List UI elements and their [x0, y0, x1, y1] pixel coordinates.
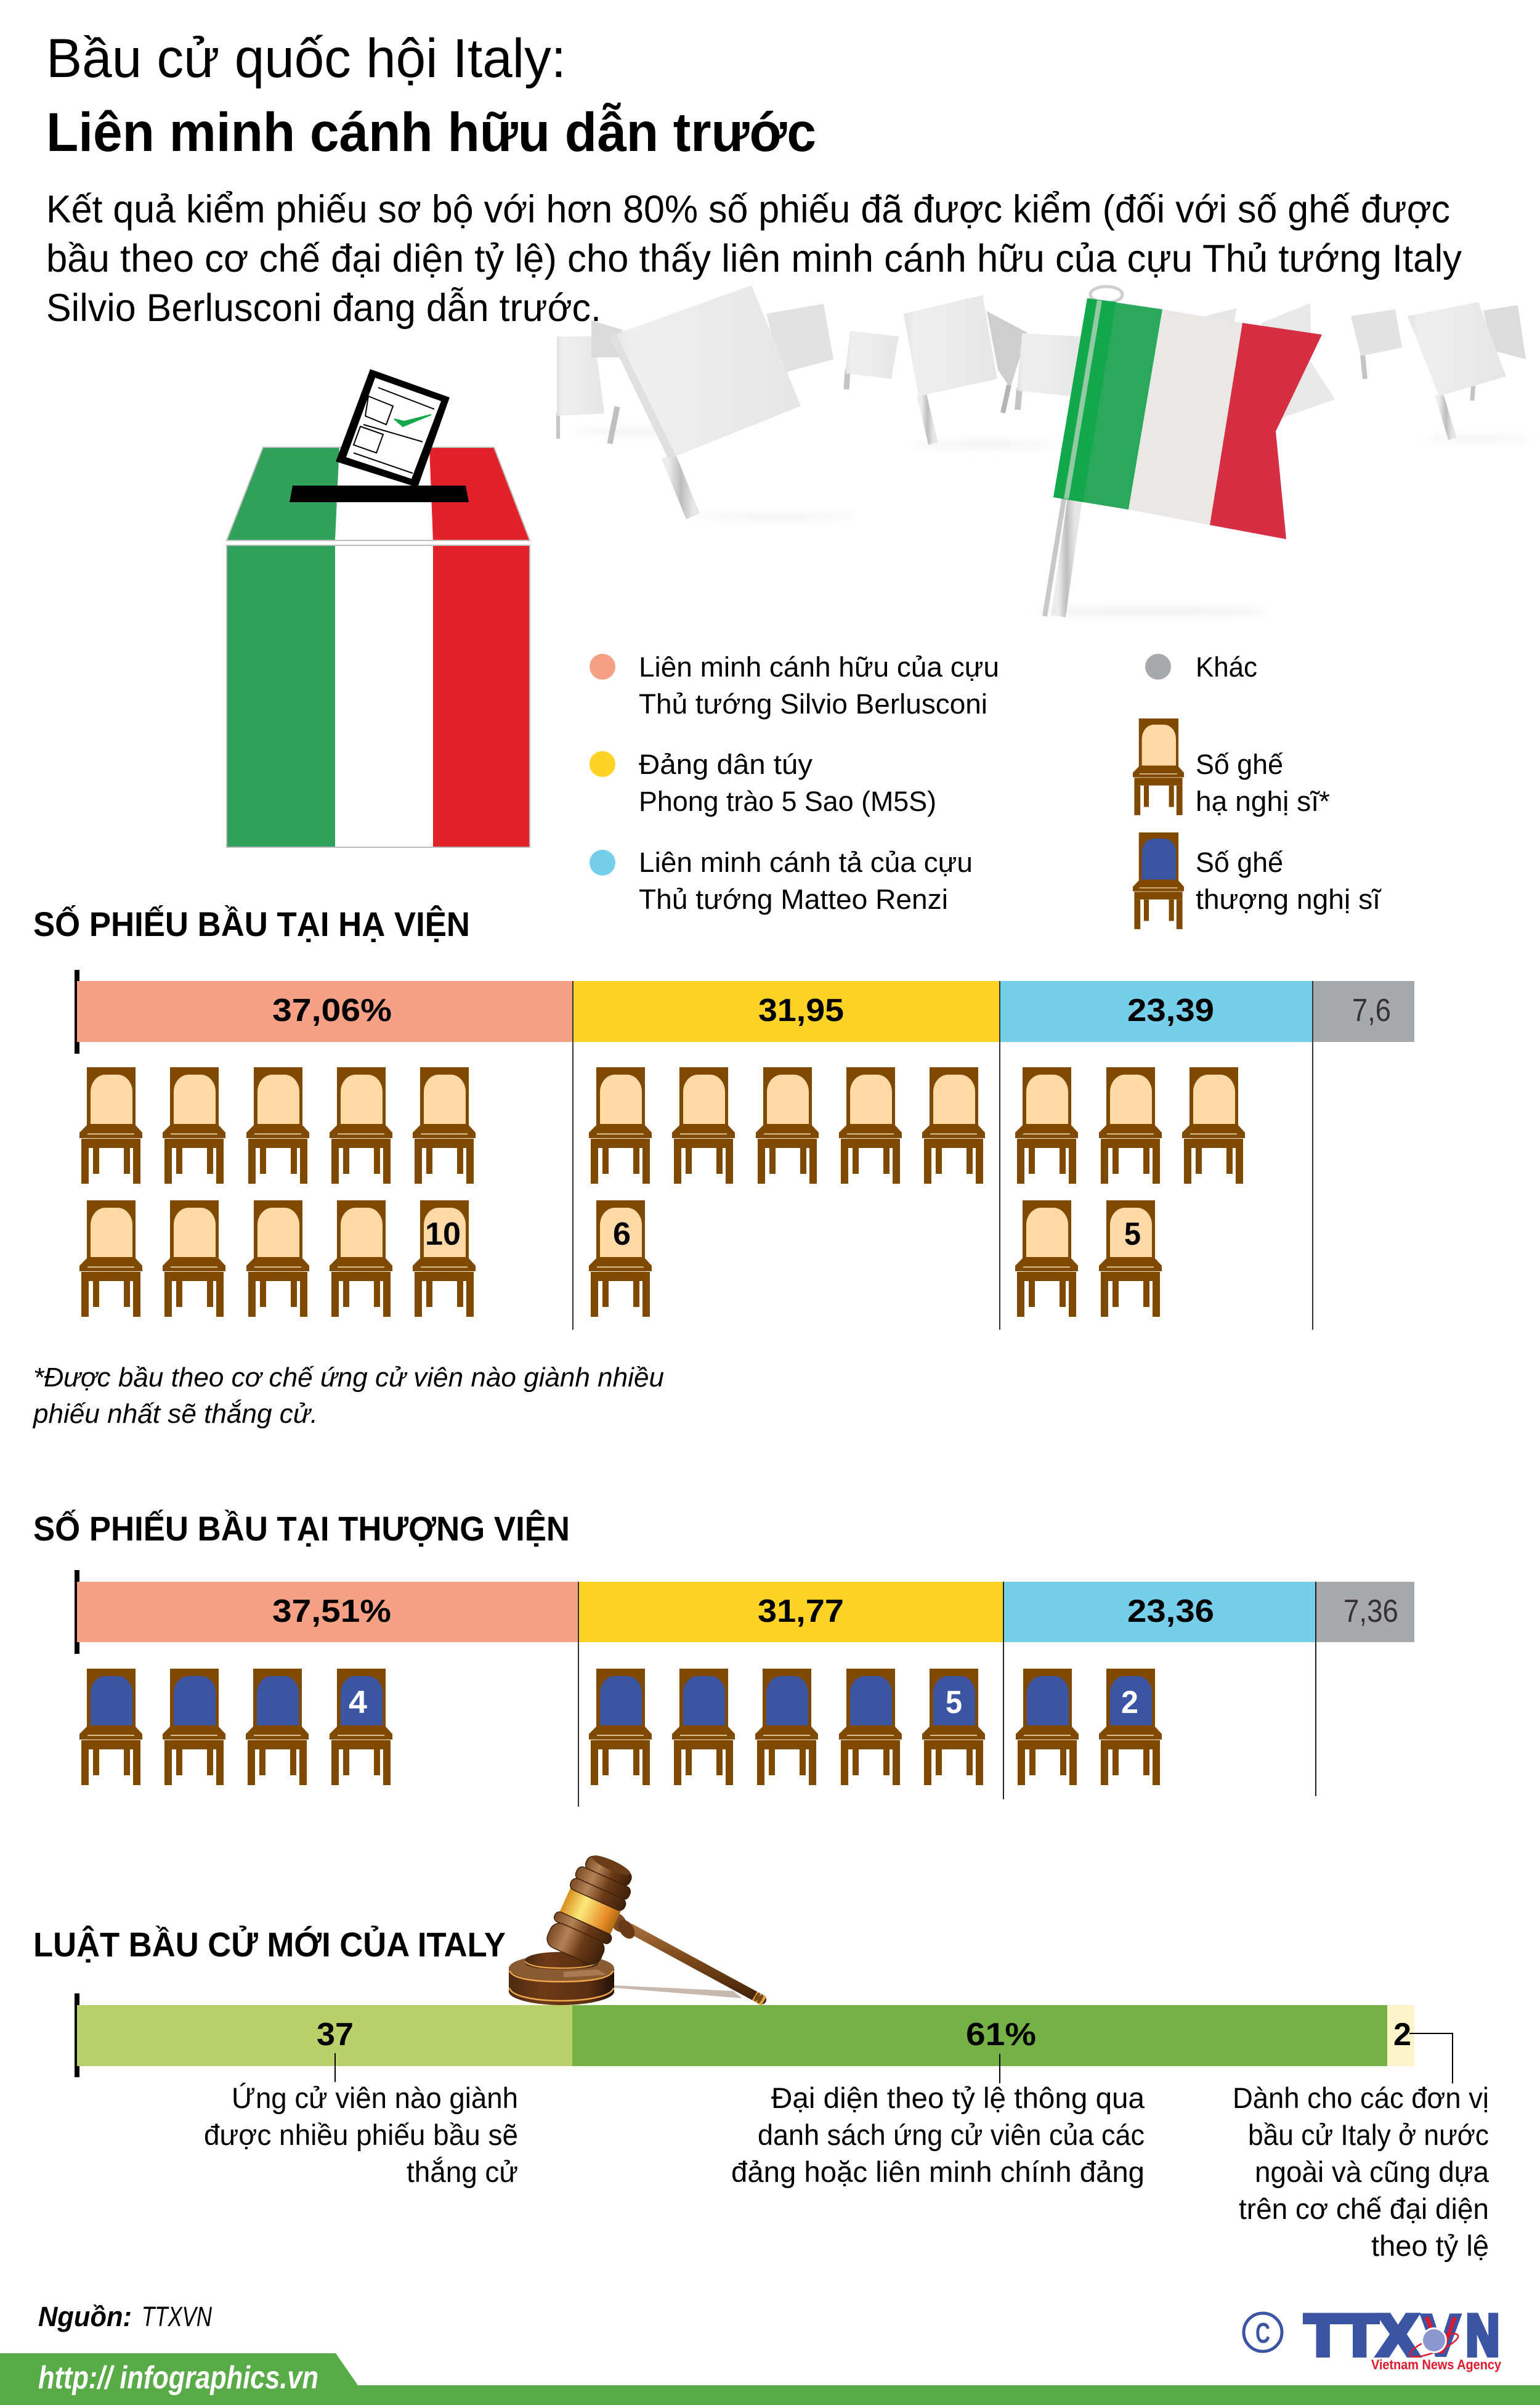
seats: senate left coalition (2): 2 [1121, 1685, 1138, 1720]
bar chart: electoral law shares [75, 1993, 1453, 2083]
logo: copyright mark [1244, 2313, 1282, 2351]
footer band with website [0, 2353, 1540, 2405]
footnote: *Được bầu theo cơ chế ứng cử viên nào giành nhiều [33, 1362, 664, 1393]
note: overseas constituencies [1233, 2081, 1489, 2262]
note: first-past-the-post seats: Ứng cử viên nào giành [232, 2081, 518, 2114]
title: Liên minh cánh hữu dẫn trước [46, 101, 816, 163]
bar chart: senate votes [75, 1570, 1414, 1807]
logo: copyright mark: C [1255, 2317, 1270, 2349]
source [38, 2301, 212, 2332]
icon: gavel [509, 1848, 764, 2005]
heading: new electoral law: LUẬT BẦU CỬ MỚI CỦA ITALY [33, 1925, 506, 1964]
note: first-past-the-post seats: thắng cử [407, 2155, 518, 2188]
legend item: lower house seat: hạ nghị sĩ* [1196, 786, 1330, 817]
bar chart: lower house votes: 23,39 [1127, 993, 1214, 1028]
heading: lower house: SỐ PHIẾU BẦU TẠI HẠ VIỆN [33, 905, 470, 943]
legend item: right-wing coalition [590, 651, 999, 720]
note: first-past-the-post seats [204, 2081, 518, 2188]
seats: lower house coalition 1 (10): 10 [425, 1216, 461, 1252]
footer band with website: http:// infographics.vn [38, 2360, 318, 2396]
legend item: other: Khác [1196, 651, 1257, 683]
seats: senate coalition 1 (4): 4 [349, 1685, 367, 1720]
legend item: left-wing coalition: Thủ tướng Matteo Renzi [639, 884, 948, 915]
seats: lower house M5S (6): 6 [613, 1216, 631, 1252]
heading: senate: SỐ PHIẾU BẦU TẠI THƯỢNG VIỆN [33, 1509, 570, 1548]
seats: lower house coalition 1 (10) [79, 1067, 476, 1317]
note: overseas constituencies: bầu cử Italy ở nước [1248, 2118, 1489, 2151]
note: overseas constituencies: trên cơ chế đại diện [1239, 2192, 1489, 2225]
legend item: senate seat: Số ghế [1196, 847, 1283, 878]
legend item: M5S: Phong trào 5 Sao (M5S) [639, 786, 936, 817]
legend item: other [1145, 651, 1257, 683]
note: proportional seats: Đại diện theo tỷ lệ thông qua [771, 2081, 1145, 2114]
seats: lower house left coalition (5): 5 [1124, 1216, 1141, 1252]
logo: TTXVN: Vietnam News Agency [1371, 2357, 1502, 2372]
bar chart: electoral law shares: 61% [966, 2017, 1036, 2053]
legend item: M5S [590, 749, 936, 817]
bar chart: senate votes: 37,51% [272, 1593, 391, 1629]
intro text: Kết quả kiểm phiếu sơ bộ với hơn 80% số phiếu đã được kiểm (đối với số ghế được [46, 188, 1450, 231]
legend item: lower house seat [1133, 718, 1330, 817]
title: Bầu cử quốc hội Italy: [46, 27, 566, 89]
note: proportional seats: danh sách ứng cử viên của các [758, 2118, 1145, 2151]
bar chart: senate votes: 23,36 [1127, 1593, 1214, 1629]
bar chart: lower house votes: 7,6 [1352, 993, 1391, 1028]
bar chart: senate votes: 7,36 [1343, 1593, 1398, 1629]
logo: TTXVN: TTX [1305, 2303, 1418, 2367]
legend item: lower house seat: Số ghế [1196, 749, 1283, 780]
note: overseas constituencies: Dành cho các đơn vị [1233, 2081, 1489, 2114]
bar chart: lower house votes [75, 970, 1414, 1330]
legend item: left-wing coalition: Liên minh cánh tả của cựu [639, 847, 973, 878]
logo: TTXVN: N [1466, 2303, 1499, 2367]
note: overseas constituencies: ngoài và cũng dựa [1255, 2155, 1489, 2188]
note: proportional seats: đảng hoặc liên minh chính đảng [731, 2155, 1145, 2188]
bar chart: electoral law shares: 37 [317, 2017, 354, 2053]
source: Nguồn: [38, 2301, 132, 2332]
legend item: senate seat [1133, 832, 1382, 929]
note: proportional seats [731, 2081, 1145, 2188]
seats: lower house M5S (6) [589, 1067, 985, 1317]
seats: senate coalition 1 (4) [79, 1669, 392, 1785]
intro text [46, 188, 1462, 330]
bar chart: lower house votes: 37,06% [272, 993, 392, 1028]
bar chart: senate votes: 31,77 [758, 1593, 844, 1629]
source: TTXVN [142, 2301, 212, 2332]
legend item: senate seat: thượng nghị sĩ [1196, 884, 1382, 915]
icon: ballot box in Italian colours [227, 369, 530, 847]
title [46, 27, 816, 163]
bar chart: electoral law shares: 2 [1393, 2017, 1411, 2053]
illustration: Italian flag pin [1035, 287, 1322, 616]
footnote: phiếu nhất sẽ thắng cử. [32, 1399, 318, 1429]
logo: TTXVN [1305, 2303, 1502, 2372]
legend item: M5S: Đảng dân túy [639, 749, 813, 780]
illustration: white flags in the background [556, 285, 1534, 520]
legend item: right-wing coalition: Liên minh cánh hữu của cựu [639, 651, 999, 683]
footnote [32, 1362, 664, 1429]
note: overseas constituencies: theo tỷ lệ [1371, 2229, 1489, 2262]
bar chart: lower house votes: 31,95 [758, 993, 844, 1028]
legend [590, 651, 1382, 929]
logo: TTXVN: V [1422, 2303, 1460, 2367]
legend item: left-wing coalition [590, 847, 973, 915]
seats: senate M5S (5) [589, 1669, 985, 1785]
intro text: Silvio Berlusconi đang dẫn trước. [46, 287, 601, 330]
seats: senate M5S (5): 5 [946, 1685, 962, 1720]
seats: senate left coalition (2) [1016, 1669, 1162, 1785]
legend item: right-wing coalition: Thủ tướng Silvio Berlusconi [639, 688, 987, 720]
seats: lower house left coalition (5) [1015, 1067, 1245, 1317]
intro text: bầu theo cơ chế đại diện tỷ lệ) cho thấy liên minh cánh hữu của cựu Thủ tướng Italy [46, 237, 1462, 280]
note: first-past-the-post seats: được nhiều phiếu bầu sẽ [204, 2118, 518, 2151]
